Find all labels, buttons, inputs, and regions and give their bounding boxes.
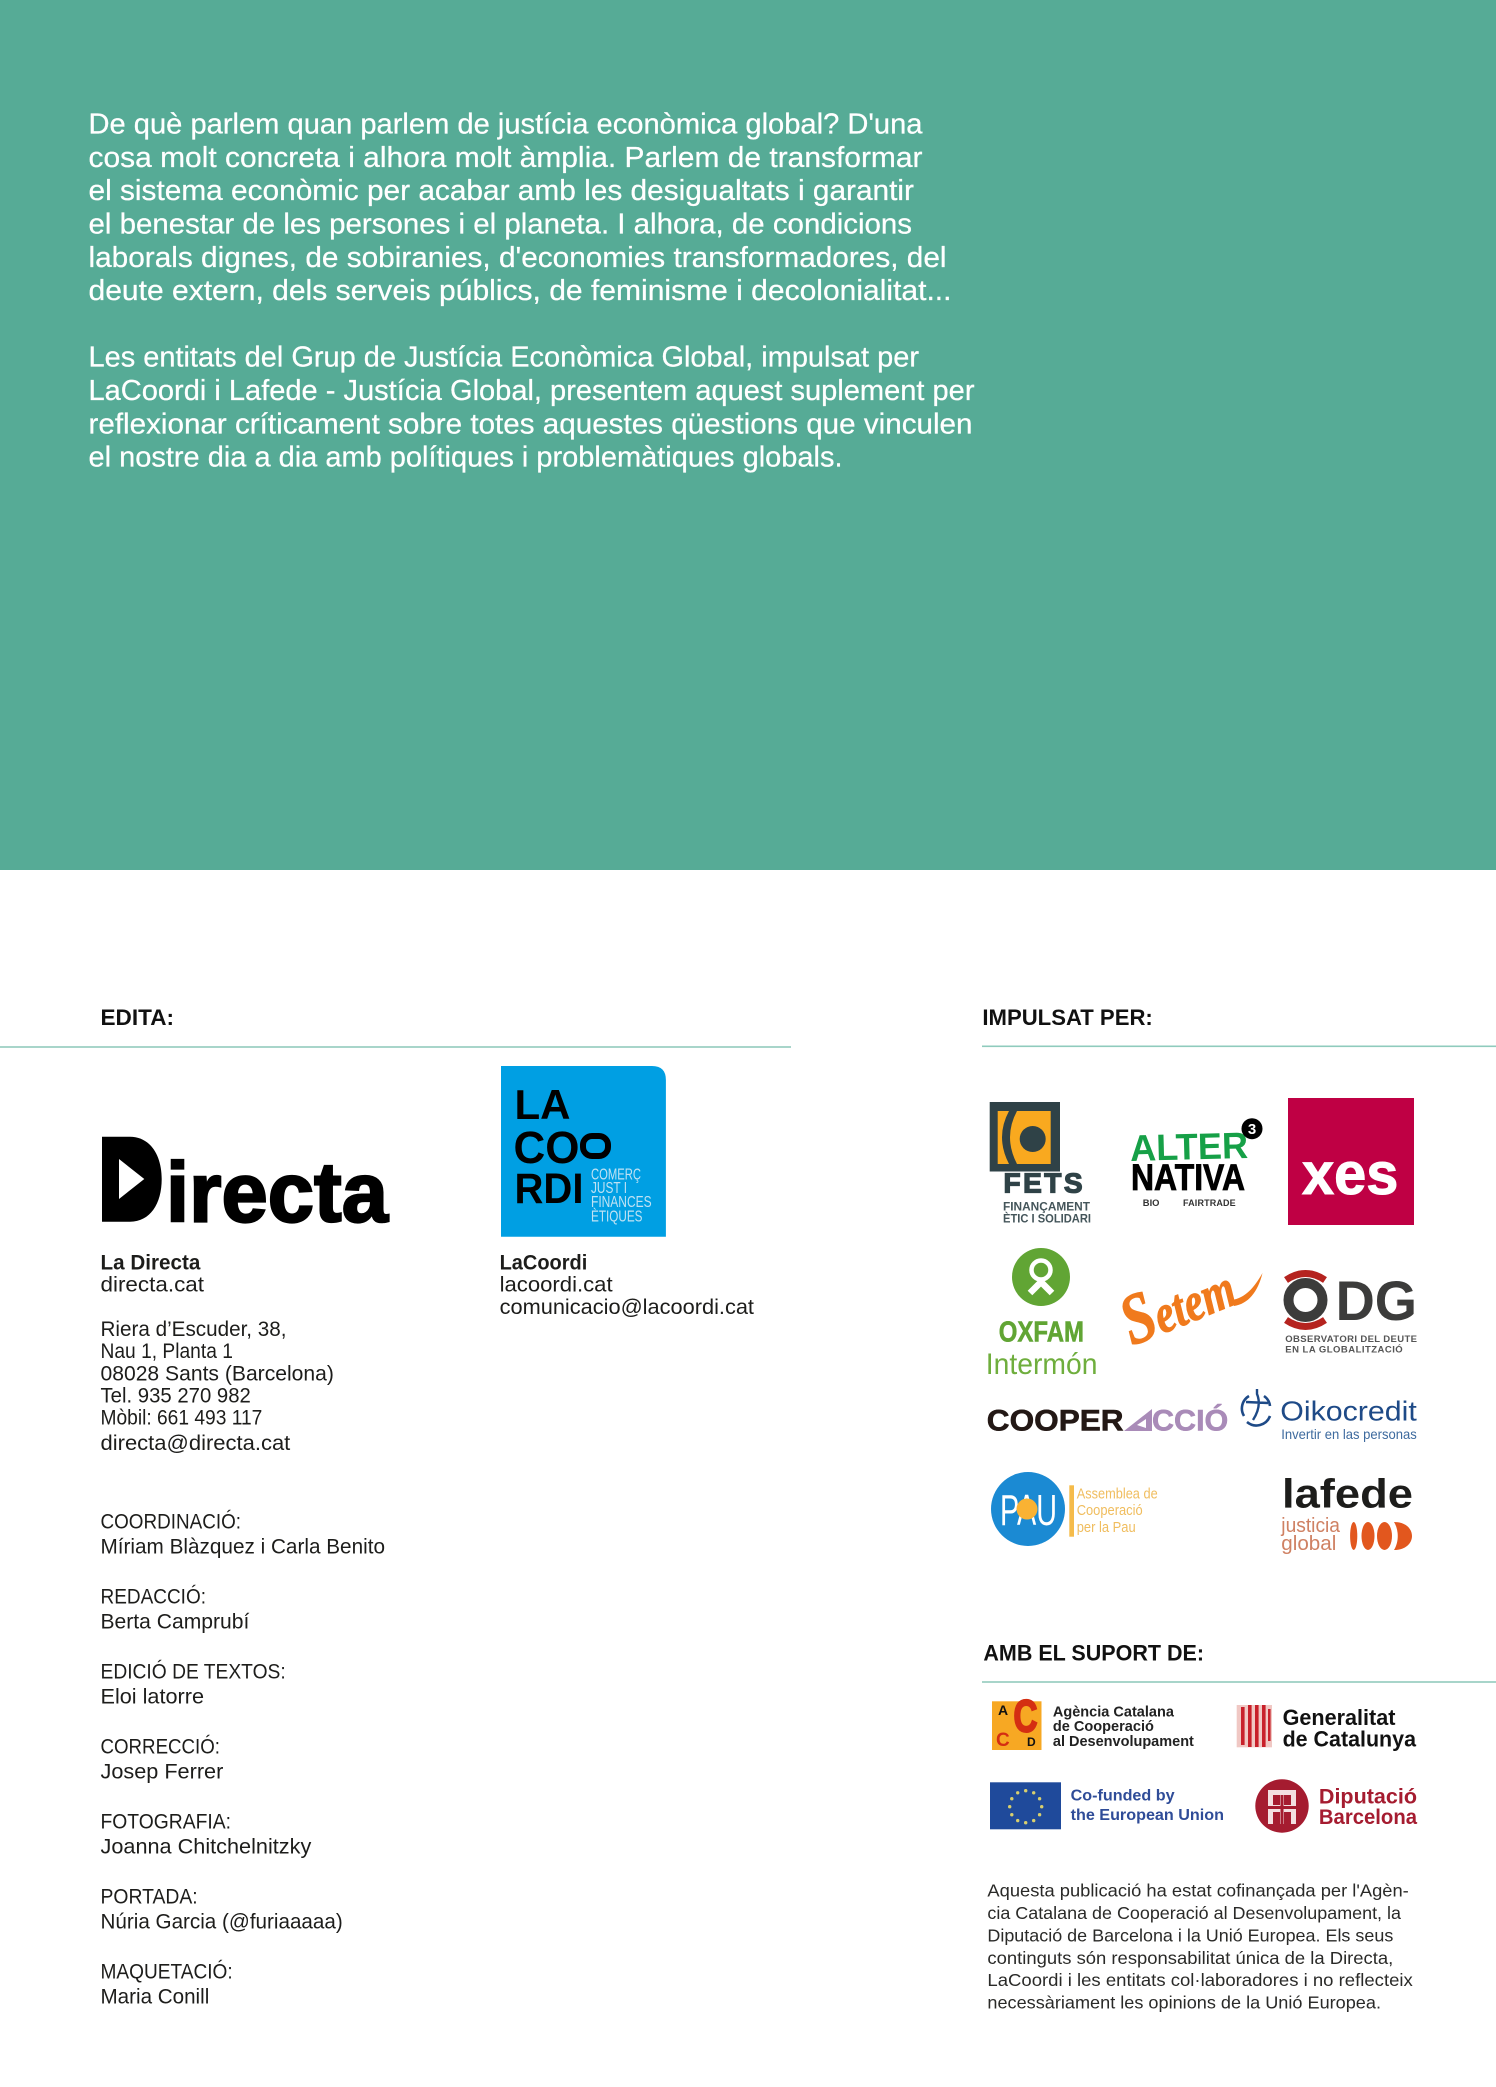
text block: credits: REDACCIÓ: [100,1585,206,1608]
logo: ACCD [992,1690,1194,1751]
logo: Diputació Barcelona [1255,1779,1417,1833]
text block: intro paragraph 2: Les entitats del Grup de Justícia Econòmica Global, impulsat per [88,342,919,374]
logo: Assemblea de Cooperació per la Pau [991,1472,1158,1546]
text block: La Directa contact: Nau 1, Planta 1 [100,1340,233,1363]
heading: AMB EL SUPORT DE: AMB EL SUPORT DE: [983,1641,1204,1666]
logo: Generalitat de Catalunya: Generalitat [1283,1705,1396,1730]
text block: credits: Berta Camprubí [100,1610,249,1633]
logo: ODG [1285,1269,1417,1356]
text block: intro paragraph 1: deute extern, dels serveis públics, de feminisme i decolonialitat... [88,275,952,307]
panel: intro teal [0,0,1496,870]
logo: Assemblea de Cooperació per la Pau: Assemblea de [1077,1486,1158,1502]
logo: LaCoordi: CO [514,1122,580,1173]
text block: La Directa contact: 08028 Sants (Barcelona) [100,1363,334,1386]
text block: LaCoordi contact: LaCoordi [500,1251,587,1274]
text block: intro paragraph 2: el nostre dia a dia amb polítiques i problemàtiques globals. [88,442,842,474]
text block: La Directa contact [100,1251,334,1455]
logo: Oxfam Intermón: Intermón [986,1348,1098,1381]
logo: ACCD: C [1014,1690,1038,1742]
logo: ACCD: Agència Catalana [1053,1704,1175,1721]
text block: credits: COORDINACIÓ: [100,1510,241,1533]
logo: LaCoordi: FINANCES [591,1194,652,1211]
logo: Oxfam Intermón: OXFAM [999,1317,1084,1349]
logo: FETS: FINANÇAMENT [1003,1202,1090,1214]
text block: intro paragraph 2: reflexionar críticament sobre totes aquestes qüestions que vinculen [88,408,972,440]
logo: xes: xes [1302,1141,1398,1207]
text block: intro paragraph 2: LaCoordi i Lafede - Justícia Global, presentem aquest suplement per [88,375,975,407]
text block: credits [100,1510,385,2008]
text block: funding note: Aquesta publicació ha estat cofinançada per l'Agèn- [987,1881,1409,1901]
text block: credits: CORRECCIÓ: [100,1735,220,1758]
text block: funding note: LaCoordi i les entitats col·laboradores i no reflecteix [987,1970,1413,1990]
text block: credits: EDICIÓ DE TEXTOS: [100,1660,286,1683]
text block: funding note: necessàriament les opinions de la Unió Europea. [987,1992,1381,2012]
text block: intro paragraph 1: laborals dignes, de sobiranies, d'economies transformadores, del [88,242,946,274]
logo: Alternativa 3: BIO [1143,1198,1160,1208]
text block: credits: Josep Ferrer [100,1760,223,1783]
logo: Lafede justícia global: justicia [1280,1515,1341,1537]
logo: ODG: OBSERVATORI DEL DEUTE [1285,1334,1417,1345]
logo: Cooperacció: COOPER [987,1405,1124,1438]
text block: intro paragraph 1: el sistema econòmic per acabar amb les desigualtats i garantir [88,175,914,207]
logo: Oikocredit [1242,1389,1417,1442]
logo: ODG: EN LA GLOBALITZACIÓ [1285,1344,1403,1356]
logo: LaCoordi: COMERÇ [591,1166,641,1183]
text block: intro paragraph 1: cosa molt concreta i alhora molt àmplia. Parlem de transformar [88,142,923,174]
text block: LaCoordi contact: comunicacio@lacoordi.cat [500,1296,754,1319]
logo: FETS: ÈTIC I SOLIDARI [1003,1213,1091,1226]
text block: La Directa contact: La Directa [100,1251,201,1274]
logo: Oikocredit: Oikocredit [1280,1396,1417,1427]
logo: Cooperacció [987,1404,1228,1438]
heading: IMPULSAT PER: IMPULSAT PER: [982,1005,1153,1030]
text block: intro paragraph 2 [88,342,975,474]
logo: European Union: the European Union [1071,1807,1224,1824]
logo: LaCoordi [501,1066,666,1237]
logo: Alternativa 3: ALTER [1130,1125,1249,1169]
text block: La Directa contact: directa.cat [100,1274,204,1297]
text block: La Directa contact: Tel. 935 270 982 [100,1385,251,1408]
text block: La Directa contact: Riera d’Escuder, 38, [100,1318,286,1341]
logo: Diputació Barcelona: Barcelona [1319,1806,1417,1829]
text block: credits: PORTADA: [100,1885,198,1908]
logo: Generalitat de Catalunya [1237,1705,1417,1752]
text block: credits: Eloi latorre [100,1685,204,1708]
logo: Oxfam Intermón [986,1248,1098,1381]
logo: ACCD: de Cooperació [1053,1718,1154,1735]
text block: credits: Míriam Blàzquez i Carla Benito [100,1535,385,1558]
logo: Setem: Setem [1108,1243,1246,1361]
logo: ACCD: al Desenvolupament [1053,1733,1194,1750]
text block: funding note: continguts són responsabilitat única de la Directa, [987,1948,1393,1968]
text block: intro paragraph 1: De què parlem quan parlem de justícia econòmica global? D'una [88,108,923,140]
logo: European Union [990,1782,1224,1829]
text block: LaCoordi contact: lacoordi.cat [500,1274,613,1297]
logo: Directa: irecta [166,1146,389,1240]
text block: La Directa contact: directa@directa.cat [100,1432,290,1455]
logo: Assemblea de Cooperació per la Pau: per la Pau [1077,1520,1136,1536]
text block: credits: Núria Garcia (@furiaaaaa) [100,1910,343,1933]
logo: Lafede justícia global: lafede [1282,1470,1413,1516]
logo: Alternativa 3: 3 [1248,1121,1256,1138]
logo: Generalitat de Catalunya: de Catalunya [1283,1727,1417,1752]
text block: credits: Maria Conill [100,1985,209,2008]
text block: intro paragraph 1: el benestar de les persones i el planeta. I alhora, de condicions [88,208,912,240]
logo: Cooperacció: CCIÓ [1152,1404,1228,1438]
logo: Diputació Barcelona: Diputació [1319,1785,1417,1808]
text block: funding note: Diputació de Barcelona i la Unió Europea. Els seus [987,1926,1394,1946]
logo: ACCD: D [1027,1735,1036,1749]
logo: Alternativa 3: NATIVA [1131,1157,1245,1198]
text block: credits: MAQUETACIÓ: [100,1960,233,1983]
logo: Lafede justícia global: global [1281,1533,1336,1555]
text block: credits: Joanna Chitchelnitzky [100,1835,312,1858]
heading: EDITA: EDITA: [100,1005,174,1030]
logo: ODG: DG [1336,1269,1417,1332]
logo: LaCoordi: ÈTIQUES [591,1209,642,1226]
logo: Oikocredit: Invertir en las personas [1281,1426,1417,1442]
logo: xes [1288,1098,1414,1225]
logo: LaCoordi: RDI [514,1165,584,1213]
logo: European Union: Co-funded by [1071,1788,1175,1805]
text block: LaCoordi contact [500,1251,754,1319]
text block: La Directa contact: Mòbil: 661 493 117 [100,1407,262,1430]
logo: Alternativa 3: FAIRTRADE [1183,1198,1236,1208]
logo: LaCoordi: JUST I [591,1180,627,1197]
text block: intro paragraph 1 [88,108,952,307]
logo: Lafede justícia global [1280,1470,1413,1555]
logo: ACCD: C [996,1730,1010,1751]
logo: Alternativa 3 [1130,1118,1262,1208]
text block: credits: FOTOGRAFIA: [100,1810,231,1833]
logo: FETS [990,1102,1091,1226]
logo: ACCD: A [998,1702,1008,1718]
text block: funding note: cia Catalana de Cooperació al Desenvolupament, la [987,1903,1401,1923]
logo: Assemblea de Cooperació per la Pau: Cooperació [1077,1503,1143,1519]
logo: Assemblea de Cooperació per la Pau: PAU [1000,1486,1057,1535]
text block: funding note [987,1881,1413,2012]
logo: LaCoordi: LA [514,1081,570,1128]
logo: FETS: FETS [1004,1168,1082,1198]
